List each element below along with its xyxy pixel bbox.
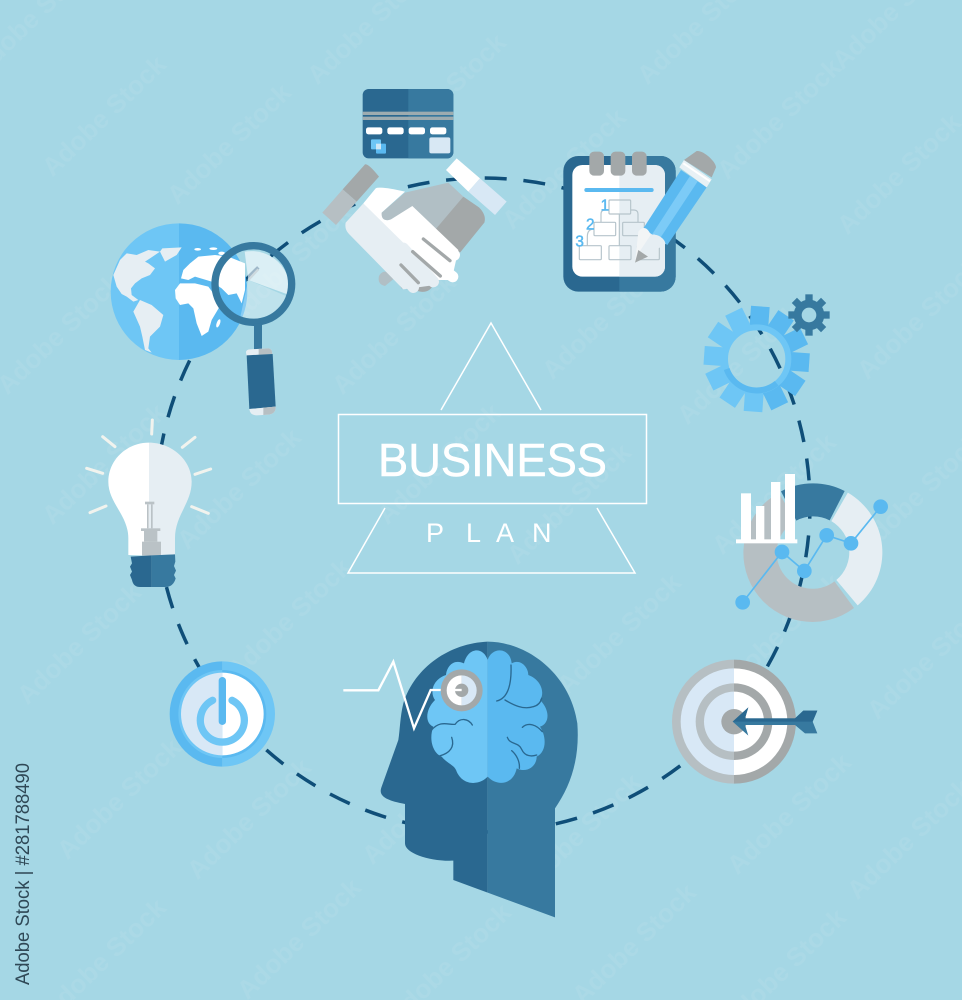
icon: notepad with org chart and pencil: 2 — [586, 217, 595, 234]
infographic canvas: Adobe Stock — [376, 27, 512, 160]
infographic canvas: Adobe Stock — [551, 567, 687, 700]
infographic canvas: Adobe Stock — [371, 397, 507, 530]
title block: Business Plan: BUSINESS — [378, 434, 607, 486]
infographic canvas: Adobe Stock — [221, 552, 357, 685]
infographic canvas: Adobe Stock — [711, 567, 847, 700]
dashed connection circle — [156, 178, 810, 832]
icon: credit card — [363, 89, 453, 158]
title block: Business Plan: PLAN — [426, 518, 552, 548]
infographic canvas: Adobe Stock — [496, 102, 632, 235]
infographic canvas: Adobe Stock — [221, 197, 357, 330]
infographic canvas: Adobe Stock — [181, 752, 317, 885]
icon: gears — [700, 294, 830, 415]
icon: light bulb — [87, 420, 211, 587]
chart: donut with bars and line — [735, 474, 888, 622]
infographic canvas: Adobe Stock — [36, 397, 172, 530]
infographic canvas: Adobe Stock — [171, 422, 307, 555]
icon: handshake — [322, 158, 507, 292]
title block: Business Plan — [338, 323, 646, 573]
icon: target with arrow — [672, 660, 817, 784]
infographic canvas: Adobe Stock — [356, 737, 492, 870]
icon: globe with magnifier — [111, 223, 292, 415]
infographic canvas: Adobe Stock — [536, 252, 672, 385]
icon: notepad with org chart and pencil — [563, 151, 716, 292]
infographic canvas: Adobe Stock — [721, 747, 857, 880]
icon: notepad with org chart and pencil: 1 — [601, 197, 609, 214]
infographic canvas: Adobe Stock — [706, 427, 842, 560]
infographic canvas: Adobe Stock — [511, 767, 647, 900]
infographic canvas: Adobe Stock — [11, 577, 147, 710]
infographic canvas: Adobe Stock — [671, 297, 807, 430]
infographic canvas: Adobe Stock — [326, 267, 462, 400]
infographic canvas: Adobe Stock — [501, 437, 637, 570]
line chart — [735, 499, 888, 610]
infographic canvas: Adobe Stock — [711, 52, 847, 185]
stock credit text: Adobe Stock | #281788490 — [13, 763, 34, 985]
icon: head with brain and pulse — [343, 642, 578, 917]
icon: notepad with org chart and pencil: 3 — [575, 234, 584, 251]
infographic canvas: Adobe Stock — [36, 49, 172, 182]
icon: power button — [170, 661, 275, 767]
infographic canvas: Adobe Stock — [51, 732, 187, 865]
bar chart — [736, 474, 797, 543]
infographic canvas: Adobe Stock — [161, 77, 297, 210]
